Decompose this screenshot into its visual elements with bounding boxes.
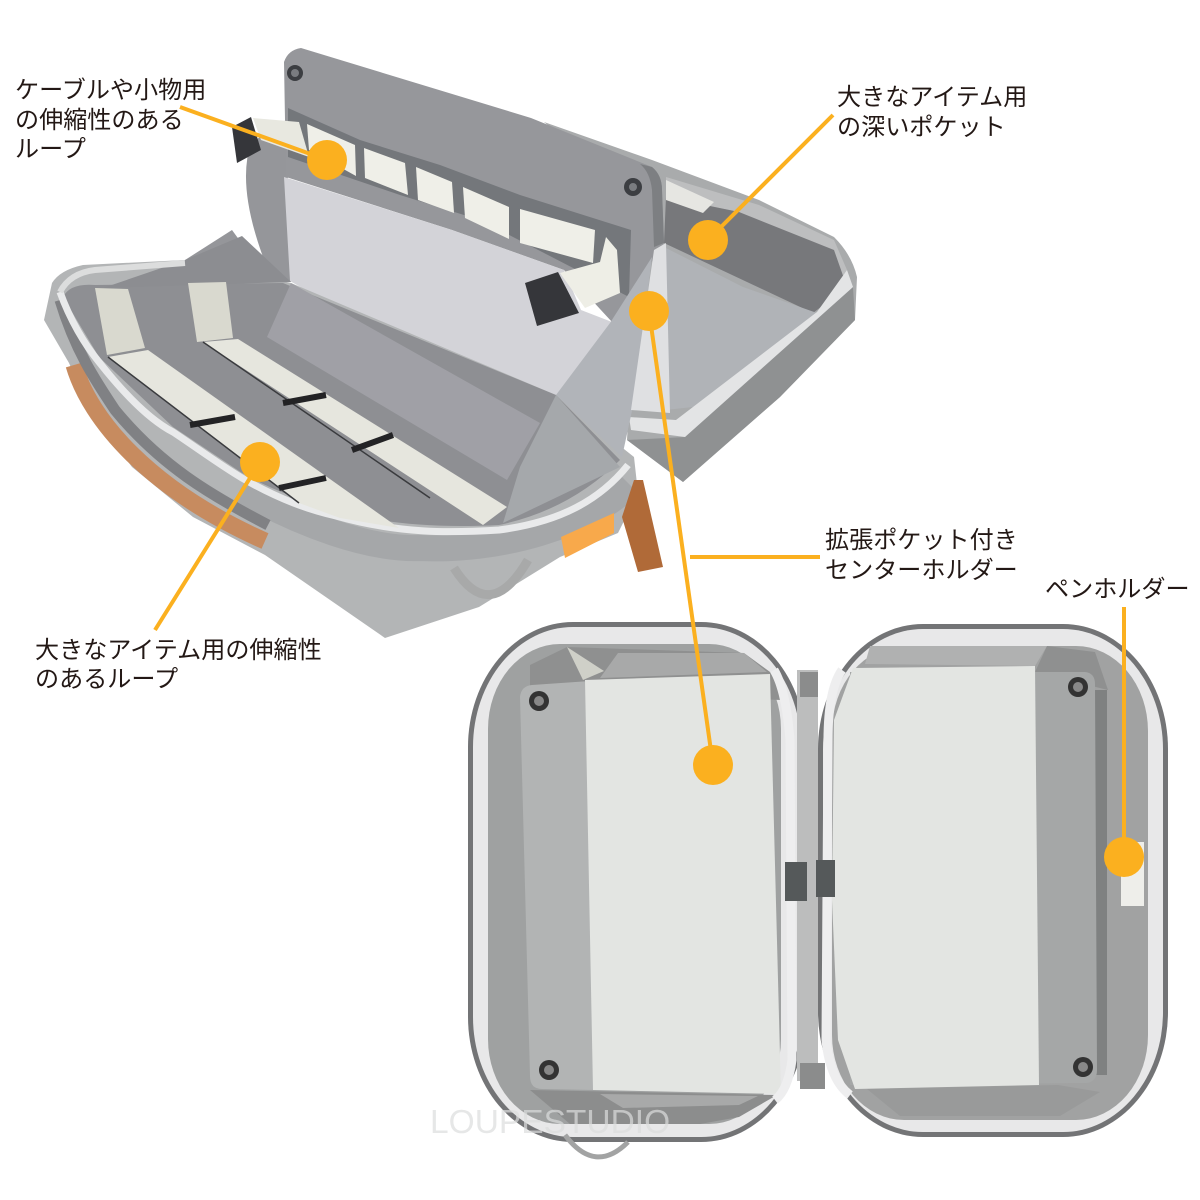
marker dot — [240, 442, 280, 482]
orange tag — [561, 513, 614, 558]
leader line — [155, 462, 260, 630]
sloped rear floor — [267, 283, 540, 480]
marker dot upper — [629, 291, 669, 331]
left gusset wall — [120, 120, 292, 285]
leader line top — [649, 311, 713, 765]
label: 大きなアイテム用 — [837, 84, 1027, 111]
callout: pen holder — [1045, 576, 1190, 877]
zip along tray — [60, 300, 268, 525]
tray elastic straps — [95, 282, 507, 528]
left lid panel — [520, 681, 594, 1090]
label: のあるループ — [35, 666, 178, 693]
tray white rim — [60, 292, 628, 532]
inner white piping — [774, 670, 850, 1100]
left half shell — [468, 622, 806, 1142]
tray grey front band — [240, 485, 630, 548]
callout: elastic loops for large items — [35, 442, 322, 693]
leader line — [1122, 607, 1126, 857]
label: ケーブルや小物用 — [15, 77, 206, 104]
marker dot lower — [693, 745, 733, 785]
left light pocket — [585, 674, 781, 1094]
leader line horizontal — [690, 555, 820, 559]
right rivets — [1068, 677, 1093, 1077]
centre hinge — [785, 670, 835, 1089]
photo: pouch fully open, flat view — [468, 622, 1168, 1157]
tray outer shell — [44, 260, 638, 638]
tray top rim — [60, 263, 185, 292]
right strap and clip on lid — [525, 237, 620, 326]
label: の深いポケット — [837, 114, 1006, 141]
marker dot — [688, 220, 728, 260]
label: ループ — [15, 136, 86, 163]
callout: cable loops — [15, 77, 347, 180]
carry loop — [454, 560, 528, 595]
label: センターホルダー — [825, 557, 1018, 584]
right gusset — [503, 243, 670, 523]
label: 大きなアイテム用の伸縮性 — [35, 637, 322, 664]
watermark: LOUPESTUDIO — [430, 1104, 670, 1141]
pen holder strap — [1121, 842, 1144, 906]
leather trim — [74, 365, 265, 541]
right lid panel — [850, 672, 1097, 1085]
marker dot — [307, 140, 347, 180]
rear compartment — [544, 122, 857, 482]
callout: deep pocket — [688, 84, 1027, 260]
upper flap behind tray — [103, 236, 291, 288]
zip pull — [622, 480, 663, 572]
marker dot — [1104, 837, 1144, 877]
tray interior — [63, 283, 620, 526]
left rivets — [529, 691, 559, 1080]
lid panel with elastic loops — [232, 48, 664, 322]
light centre pocket — [284, 177, 612, 425]
callout: centre holder — [629, 291, 1018, 785]
right half shell — [818, 624, 1168, 1137]
right light pocket — [832, 666, 1039, 1089]
leader line — [708, 115, 833, 240]
leader line — [180, 107, 327, 160]
label: ペンホルダー — [1045, 576, 1190, 603]
bottom pull loop — [565, 1135, 628, 1157]
photo: open organizer pouch, angled view — [44, 48, 857, 638]
label: の伸縮性のある — [15, 107, 184, 134]
label: 拡張ポケット付き — [825, 527, 1018, 554]
